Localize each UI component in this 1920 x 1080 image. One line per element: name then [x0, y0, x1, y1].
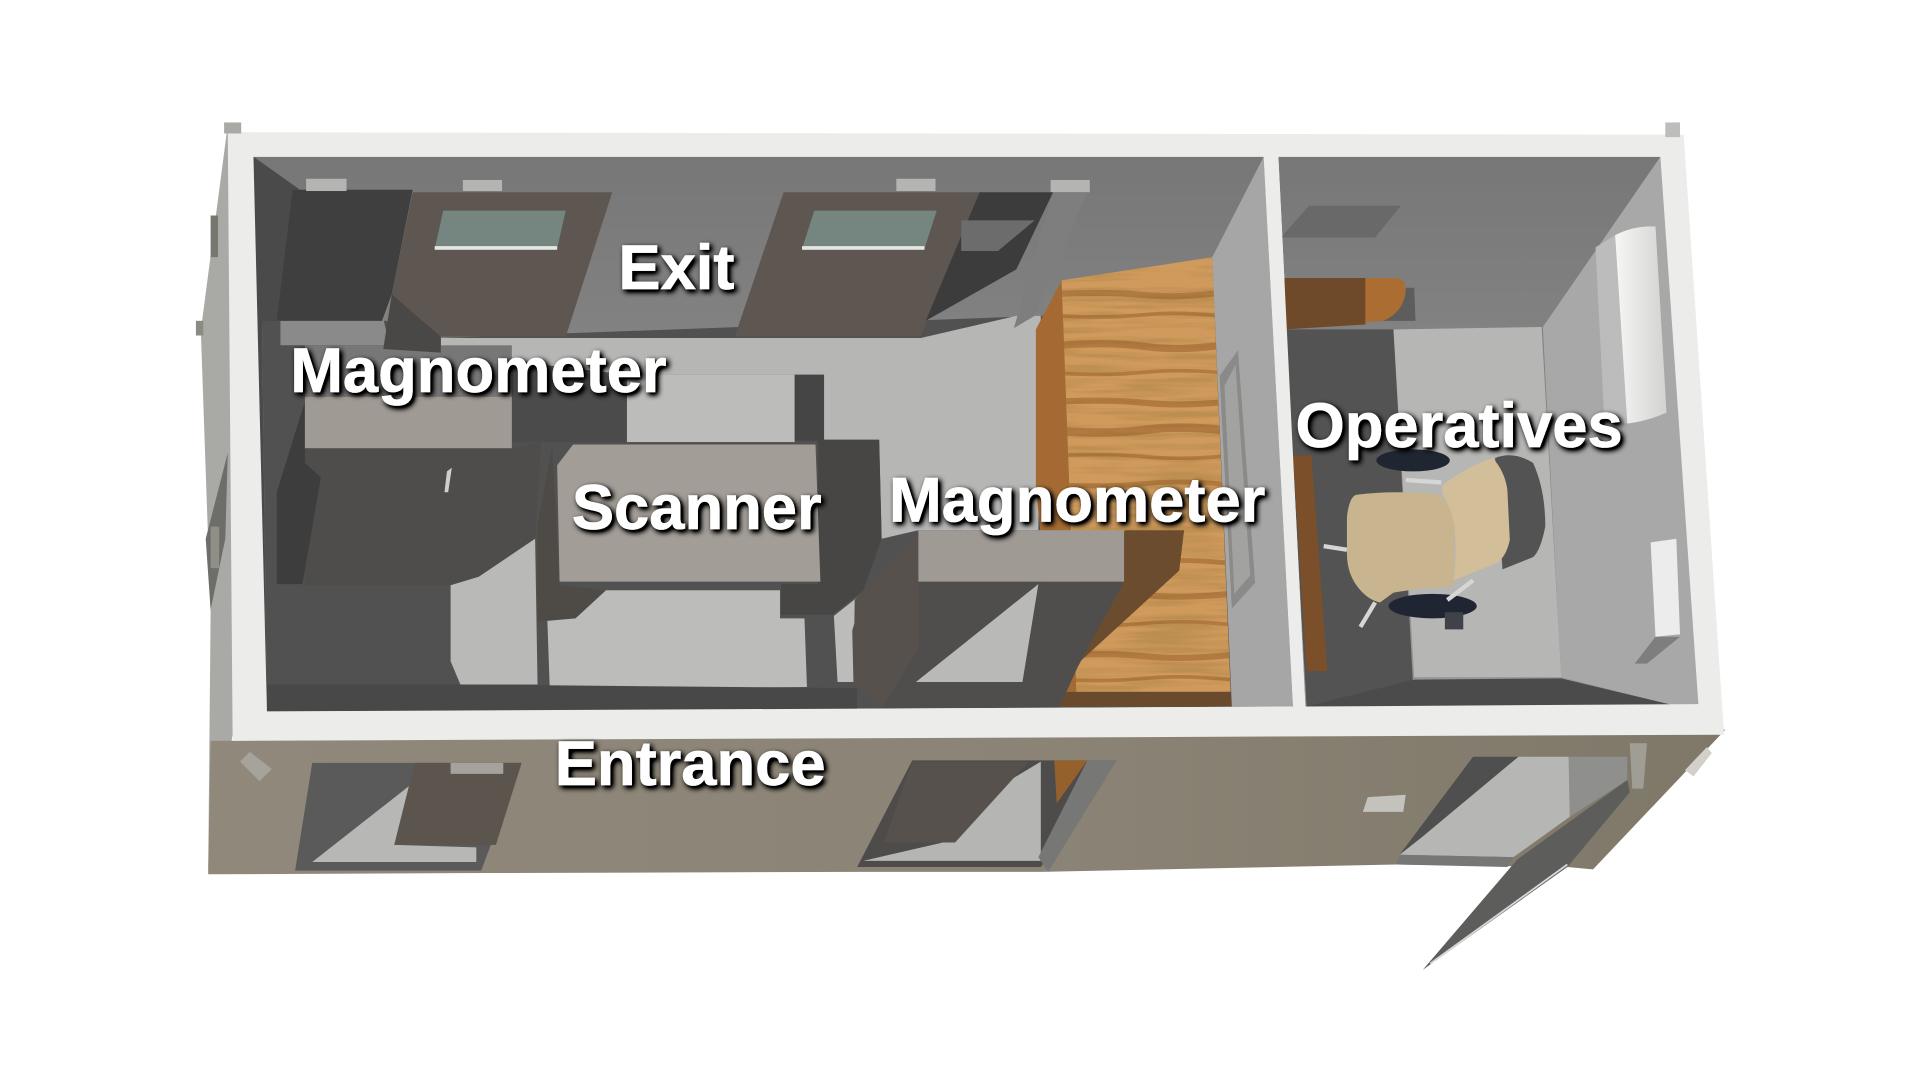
entrance doorway: [295, 763, 522, 871]
office chair: [1324, 449, 1545, 629]
scanner: [538, 440, 882, 689]
small wall box: [1635, 539, 1680, 664]
floor patch right of scanner: [834, 593, 863, 682]
main room interior: [253, 157, 1293, 711]
left door shadow: [277, 190, 413, 321]
left floor strip: [280, 318, 389, 345]
exit door left: [306, 179, 612, 337]
label: Magnometer left: Magnometer: [290, 336, 667, 406]
exit door right: [735, 179, 1090, 337]
label: Entrance: Entrance: [555, 729, 826, 799]
magnometer right: [853, 530, 1124, 708]
left exterior end wall: [196, 125, 255, 872]
wall shelf: [1281, 206, 1401, 238]
column shadow: [795, 375, 824, 441]
open entry door: [1423, 743, 1712, 970]
desk: [1284, 278, 1416, 671]
label: Operatives: Operatives: [1296, 391, 1623, 461]
area behind left magnometer label: [305, 345, 512, 397]
upper floor: [441, 316, 1041, 539]
corner shadow: [253, 157, 300, 711]
left wall fitting: [240, 752, 272, 781]
dark wedge under left door: [383, 294, 441, 353]
operatives doorway: [1396, 757, 1627, 867]
bottom exterior wall with door openings: [208, 730, 1725, 874]
floor dark: [1286, 329, 1414, 707]
floor front shadow: [1307, 678, 1679, 707]
label: Exit: Exit: [618, 233, 734, 303]
floor base: [262, 316, 1293, 711]
floor patch left: [451, 539, 538, 684]
right wall: [1543, 157, 1700, 707]
floor front shadow: [267, 684, 857, 711]
floor patch behind scanner: [627, 375, 795, 442]
illustration: overhead view of security cabin: [196, 122, 1726, 970]
middle doorway: [857, 760, 1117, 872]
operatives room interior: [1278, 157, 1700, 707]
wall plate: [1363, 795, 1406, 812]
magnometer left: [277, 375, 627, 585]
label: Scanner: Scanner: [572, 473, 822, 543]
wood counter: [1036, 251, 1237, 707]
right wall of main room: [1212, 157, 1293, 707]
corner posts: [224, 122, 1680, 137]
white wall tops: [228, 132, 1724, 741]
floor light: [1393, 327, 1561, 677]
label: Magnometer right: Magnometer: [889, 466, 1265, 536]
roll blind: [1596, 226, 1667, 424]
